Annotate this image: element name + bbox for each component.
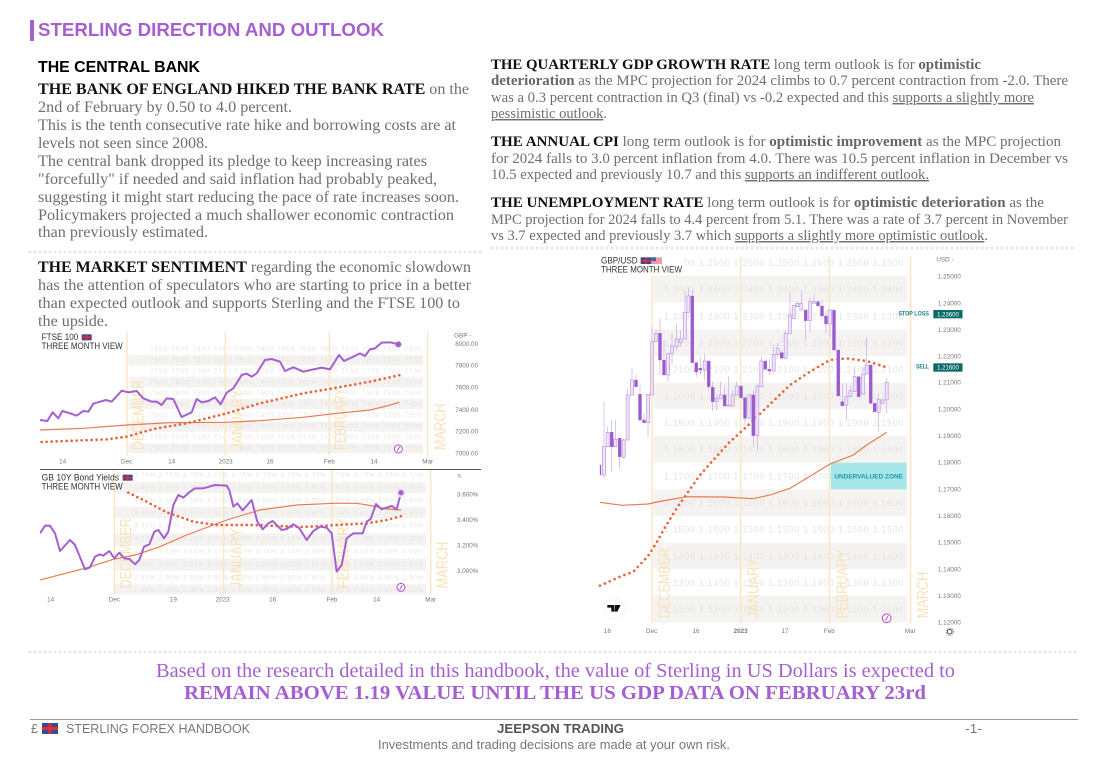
- text block: annual CPI: 10.5 expected and previously 10.7 and this supports an indifferent outlook.: [491, 167, 929, 183]
- date axis: 17: [781, 628, 789, 635]
- sell tag: SELL: [916, 365, 929, 371]
- month markers: DECEMBER: [118, 518, 135, 588]
- date axis: 2023: [219, 459, 233, 466]
- chart: GB 10Y bond yields three month view: [40, 470, 479, 603]
- dotted moving average: [128, 493, 402, 527]
- date axis: 16: [269, 596, 277, 603]
- title: STERLING DIRECTION AND OUTLOOK: [38, 20, 384, 40]
- date axis: 16: [604, 628, 611, 635]
- stop loss tag: 1.23600: [937, 312, 959, 318]
- dotted moving average: [600, 358, 887, 586]
- price line: [40, 342, 398, 421]
- conclusion callout: REMAIN ABOVE 1.19 VALUE UNTIL THE US GDP DATA ON FEBRUARY 23rd: [184, 683, 926, 704]
- yield watermark rows: 2.80% 2.80% 2.80% 2.80% 2.80% 2.80% 2.80% 2.80% 2.80% 2.80% 2.80% 2.80%: [134, 587, 424, 594]
- month markers: JANUARY: [229, 528, 246, 588]
- text block: central bank: suggesting it might start reducing the pace of rate increases soon.: [38, 189, 459, 206]
- price watermark rows: 7200 7200 7200 7200 7200 7200 7200 7200 7200 7200 7200 7200 7200: [150, 423, 422, 430]
- rate axis: 1.19000: [938, 433, 961, 440]
- rate watermark rows: 1.2200 1.2200 1.2200 1.2200 1.2200 1.2200 1.2200: [664, 338, 903, 348]
- solid moving average: [600, 432, 887, 505]
- text block: unemployment rate: MPC projection for 2024 falls to 4.4 percent from 5.1. There was a rate of 3.7 percent in November: [491, 212, 1068, 228]
- footer: [31, 722, 982, 752]
- rate watermark rows: [664, 258, 903, 615]
- date axis: Dec: [121, 459, 132, 466]
- price axis: 7200.00: [455, 429, 479, 436]
- sell tag: [916, 363, 963, 372]
- month markers: [127, 332, 450, 455]
- stop loss tag: [898, 310, 963, 318]
- text block: unemployment rate: THE UNEMPLOYMENT RATE long term outlook is for optimistic deterioration as the: [491, 195, 1044, 211]
- yield line: [40, 485, 401, 572]
- text block: central bank: THE BANK OF ENGLAND HIKED THE BANK RATE on the: [38, 81, 469, 98]
- undervalued zone: [831, 463, 907, 489]
- date axis: Dec: [109, 596, 120, 603]
- footer: -1-: [965, 722, 982, 736]
- text block: market sentiment: has the attention of speculators who are starting to price in a better: [38, 277, 472, 294]
- text block: market sentiment: [38, 259, 472, 330]
- conclusion callout: [156, 661, 955, 704]
- price watermark rows: 7300 7300 7300 7300 7300 7300 7300 7300 7300 7300 7300 7300 7300: [150, 412, 422, 419]
- date axis: 14: [47, 596, 55, 603]
- chart title: FTSE 100: [42, 332, 78, 342]
- rate axis: USD -: [936, 256, 954, 263]
- footer: JEEPSON TRADING: [497, 722, 624, 736]
- month markers: DECEMBER: [131, 380, 148, 450]
- text block: annual CPI: THE ANNUAL CPI long term outlook is for optimistic improvement as the MPC projection: [491, 134, 1062, 150]
- text block: annual CPI: for 2024 falls to 3.0 percent inflation from 4.0. There was 10.5 percent inflation in December vs: [491, 151, 1068, 167]
- rate axis: 1.25000: [938, 274, 961, 281]
- text block: market sentiment: than expected outlook and supports Sterling and the FTSE 100 to: [38, 295, 460, 312]
- last yield dot: [396, 488, 406, 497]
- date axis: 16: [266, 459, 274, 466]
- date axis: Mar: [425, 596, 436, 603]
- date axis: 2023: [216, 596, 230, 603]
- rate axis: 1.22000: [938, 354, 961, 361]
- rate axis: 1.16000: [938, 513, 961, 520]
- month markers: MARCH: [915, 572, 932, 618]
- chart title: THREE MONTH VIEW: [42, 481, 123, 491]
- text block: central bank: Policymakers projected a much shallower economic contraction: [38, 207, 454, 224]
- yield axis: 3.000%: [457, 568, 479, 575]
- yield axis: [457, 473, 479, 575]
- sell tag: 1.21600: [937, 366, 959, 372]
- rate watermark rows: 1.1600 1.1600 1.1600 1.1600 1.1600 1.1600 1.1600: [664, 498, 903, 508]
- month markers: FEBRUARY: [835, 550, 852, 618]
- date axis: Feb: [824, 628, 835, 635]
- rate axis: 1.20000: [938, 406, 961, 413]
- rate watermark rows: 1.2500 1.2500 1.2500 1.2500 1.2500 1.2500 1.2500: [664, 258, 903, 268]
- price axis: 7400.00: [455, 407, 479, 414]
- chart: GBP/USD three month view: [598, 255, 963, 635]
- month markers: [652, 257, 932, 623]
- month markers: DECEMBER: [657, 548, 674, 618]
- yield axis: 3.400%: [457, 517, 479, 524]
- rate axis: 1.17000: [938, 486, 961, 493]
- price watermark rows: [150, 346, 422, 452]
- stop loss tag: STOP LOSS: [898, 311, 929, 317]
- rate axis: 1.15000: [938, 540, 961, 547]
- text block: central bank: The central bank dropped its pledge to keep increasing rates: [38, 153, 427, 170]
- price watermark rows: 7800 7800 7800 7800 7800 7800 7800 7800 7800 7800 7800 7800 7800: [150, 357, 422, 364]
- last price dot: [395, 341, 401, 347]
- chart title: [598, 255, 683, 275]
- date axis: 19: [170, 596, 177, 603]
- month markers: [114, 470, 452, 595]
- month markers: JANUARY: [746, 558, 763, 618]
- chart title: THREE MONTH VIEW: [601, 265, 682, 275]
- rate axis: [936, 256, 961, 627]
- date axis: 14: [370, 459, 378, 466]
- text block: quarterly GDP growth rate: [491, 57, 1068, 122]
- yield watermark rows: 3.40% 3.40% 3.40% 3.40% 3.40% 3.40% 3.40% 3.40% 3.40% 3.40% 3.40% 3.40%: [134, 510, 424, 517]
- yield axis: s.: [458, 473, 463, 480]
- price axis: 8000.00: [455, 341, 479, 348]
- text block: unemployment rate: [491, 195, 1068, 244]
- rate axis: 1.12000: [938, 620, 961, 627]
- rate watermark rows: 1.1300 1.1300 1.1300 1.1300 1.1300 1.1300 1.1300: [664, 578, 903, 588]
- yield axis: 3.600%: [457, 491, 479, 498]
- month markers: FEBRUARY: [333, 388, 350, 450]
- date axis: [59, 459, 433, 466]
- chart: FTSE 100 three month view: [40, 332, 479, 466]
- yield watermark rows: 3.50% 3.50% 3.50% 3.50% 3.50% 3.50% 3.50% 3.50% 3.50% 3.50% 3.50% 3.50%: [134, 497, 424, 504]
- price watermark rows: 7500 7500 7500 7500 7500 7500 7500 7500 7500 7500 7500 7500 7500: [150, 390, 422, 397]
- icon: TradingView logo: [604, 598, 624, 619]
- price axis: GBP -: [454, 333, 471, 340]
- rate watermark rows: 1.2100 1.2100 1.2100 1.2100 1.2100 1.2100 1.2100: [664, 365, 903, 375]
- chart title: [42, 472, 133, 491]
- rate watermark rows: 1.1800 1.1800 1.1800 1.1800 1.1800 1.1800 1.1800: [664, 445, 903, 455]
- icon: lightning badge: [394, 445, 402, 453]
- text block: central bank: 2nd of February by 0.50 to 4.0 percent.: [38, 99, 292, 116]
- date axis: [47, 596, 436, 603]
- solid moving average: [40, 402, 399, 430]
- yield watermark rows: 2.90% 2.90% 2.90% 2.90% 2.90% 2.90% 2.90% 2.90% 2.90% 2.90% 2.90% 2.90%: [134, 574, 424, 581]
- rate watermark rows: 1.2400 1.2400 1.2400 1.2400 1.2400 1.2400 1.2400: [664, 285, 903, 295]
- rate axis: 1.18000: [938, 460, 961, 467]
- date axis: Dec: [646, 628, 657, 635]
- date axis: Mar: [422, 459, 433, 466]
- footer: Investments and trading decisions are made at your own risk.: [378, 738, 730, 752]
- footer: handbook name: £: [31, 722, 38, 736]
- rate watermark rows: 1.2000 1.2000 1.2000 1.2000 1.2000 1.2000 1.2000: [664, 391, 903, 401]
- undervalued zone: UNDERVALUED ZONE: [834, 473, 904, 480]
- price watermark rows: 7000 7000 7000 7000 7000 7000 7000 7000 7000 7000 7000 7000 7000: [150, 445, 422, 452]
- yield watermark rows: 3.70% 3.70% 3.70% 3.70% 3.70% 3.70% 3.70% 3.70% 3.70% 3.70% 3.70% 3.70%: [134, 472, 424, 479]
- rate watermark rows: 1.1500 1.1500 1.1500 1.1500 1.1500 1.1500 1.1500: [664, 525, 903, 535]
- date axis: 14: [168, 459, 176, 466]
- rate watermark rows: 1.1900 1.1900 1.1900 1.1900 1.1900 1.1900 1.1900: [664, 418, 903, 428]
- chart title: THREE MONTH VIEW: [42, 341, 123, 351]
- date axis: Mar: [905, 628, 916, 635]
- yield watermark rows: 3.60% 3.60% 3.60% 3.60% 3.60% 3.60% 3.60% 3.60% 3.60% 3.60% 3.60% 3.60%: [134, 485, 424, 492]
- text block: market sentiment: THE MARKET SENTIMENT regarding the economic slowdown: [38, 259, 471, 276]
- price axis: [454, 333, 479, 457]
- date axis: Feb: [327, 596, 338, 603]
- text block: central bank: [38, 81, 469, 241]
- yield watermark rows: 3.30% 3.30% 3.30% 3.30% 3.30% 3.30% 3.30% 3.30% 3.30% 3.30% 3.30% 3.30%: [134, 523, 424, 530]
- date axis: 16: [692, 628, 700, 635]
- date axis: 14: [59, 459, 67, 466]
- rate axis: 1.23000: [938, 327, 961, 334]
- text block: quarterly GDP growth rate: was a 0.3 percent contraction in Q3 (final) vs -0.2 expected and this supports a slightly more: [491, 90, 1034, 106]
- dotted moving average: [42, 375, 400, 442]
- rate axis: 1.21000: [938, 380, 961, 387]
- rate axis: 1.13000: [938, 593, 961, 600]
- text block: quarterly GDP growth rate: THE QUARTERLY GDP GROWTH RATE long term outlook is for optimistic: [491, 57, 982, 73]
- text block: central bank: This is the tenth consecutive rate hike and borrowing costs are at: [38, 117, 457, 134]
- solid moving average: [40, 503, 401, 580]
- price watermark rows: 7900 7900 7900 7900 7900 7900 7900 7900 7900 7900 7900 7900 7900: [150, 346, 422, 353]
- conclusion callout: Based on the research detailed in this handbook, the value of Sterling in US Dollars is expected to: [156, 661, 955, 682]
- price axis: 7600.00: [455, 385, 479, 392]
- price watermark rows: 7600 7600 7600 7600 7600 7600 7600 7600 7600 7600 7600 7600 7600: [150, 379, 422, 386]
- chart title: GBP/USD: [601, 255, 638, 265]
- heading: the central bank: THE CENTRAL BANK: [38, 59, 200, 76]
- price watermark rows: 7700 7700 7700 7700 7700 7700 7700 7700 7700 7700 7700 7700 7700: [150, 368, 422, 375]
- yield watermark rows: [134, 472, 424, 594]
- candlesticks: [600, 287, 888, 478]
- month markers: MARCH: [435, 542, 452, 588]
- text block: market sentiment: the upside.: [38, 313, 108, 330]
- price axis: 7800.00: [455, 363, 479, 370]
- text block: quarterly GDP growth rate: deterioration as the MPC projection for 2024 climbs to 0.7 percent contraction from -2.0. There: [491, 73, 1068, 89]
- month markers: MARCH: [433, 403, 450, 450]
- text block: annual CPI: [491, 134, 1068, 183]
- yield watermark rows: 3.20% 3.20% 3.20% 3.20% 3.20% 3.20% 3.20% 3.20% 3.20% 3.20% 3.20% 3.20%: [134, 536, 424, 543]
- text block: central bank: levels not seen since 2008.: [38, 135, 208, 152]
- date axis: 2023: [734, 628, 748, 635]
- text block: unemployment rate: vs 3.7 expected and previously 3.7 which supports a slightly more optimistic outlook.: [491, 228, 988, 244]
- chart title: GB 10Y Bond Yields: [42, 472, 119, 482]
- rate watermark rows: 1.1700 1.1700 1.1700 1.1700 1.1700 1.1700 1.1700: [664, 471, 903, 481]
- rate axis: 1.14000: [938, 566, 961, 573]
- footer: handbook name: STERLING FOREX HANDBOOK: [66, 722, 251, 736]
- date axis: 14: [373, 596, 381, 603]
- date axis: Feb: [324, 459, 335, 466]
- icon: lightning badge: [397, 583, 405, 591]
- icon: settings gear: [946, 628, 953, 635]
- price watermark rows: 7400 7400 7400 7400 7400 7400 7400 7400 7400 7400 7400 7400 7400: [150, 401, 422, 408]
- price axis: 7000.00: [455, 450, 479, 457]
- yield watermark rows: 3.10% 3.10% 3.10% 3.10% 3.10% 3.10% 3.10% 3.10% 3.10% 3.10% 3.10% 3.10%: [134, 549, 424, 556]
- rate watermark rows: 1.2300 1.2300 1.2300 1.2300 1.2300 1.2300 1.2300: [664, 311, 903, 321]
- text block: central bank: "forcefully" if needed and said inflation had probably peaked,: [38, 171, 437, 188]
- date axis: [604, 628, 916, 635]
- icon: lightning badge: [882, 614, 891, 623]
- text block: central bank: than previously estimated.: [38, 224, 208, 241]
- chart title: [42, 332, 123, 351]
- month markers: JANUARY: [229, 390, 246, 450]
- rate watermark rows: 1.1400 1.1400 1.1400 1.1400 1.1400 1.1400 1.1400: [664, 551, 903, 561]
- text block: quarterly GDP growth rate: pessimistic outlook.: [491, 106, 607, 122]
- yield watermark rows: 3.00% 3.00% 3.00% 3.00% 3.00% 3.00% 3.00% 3.00% 3.00% 3.00% 3.00% 3.00%: [134, 561, 424, 568]
- rate watermark rows: 1.1200 1.1200 1.1200 1.1200 1.1200 1.1200 1.1200: [664, 605, 903, 615]
- yield axis: 3.200%: [457, 543, 479, 550]
- month markers: FEBRUARY: [335, 518, 352, 588]
- rate axis: 1.24000: [938, 300, 961, 307]
- price watermark rows: 7100 7100 7100 7100 7100 7100 7100 7100 7100 7100 7100 7100 7100: [150, 434, 422, 441]
